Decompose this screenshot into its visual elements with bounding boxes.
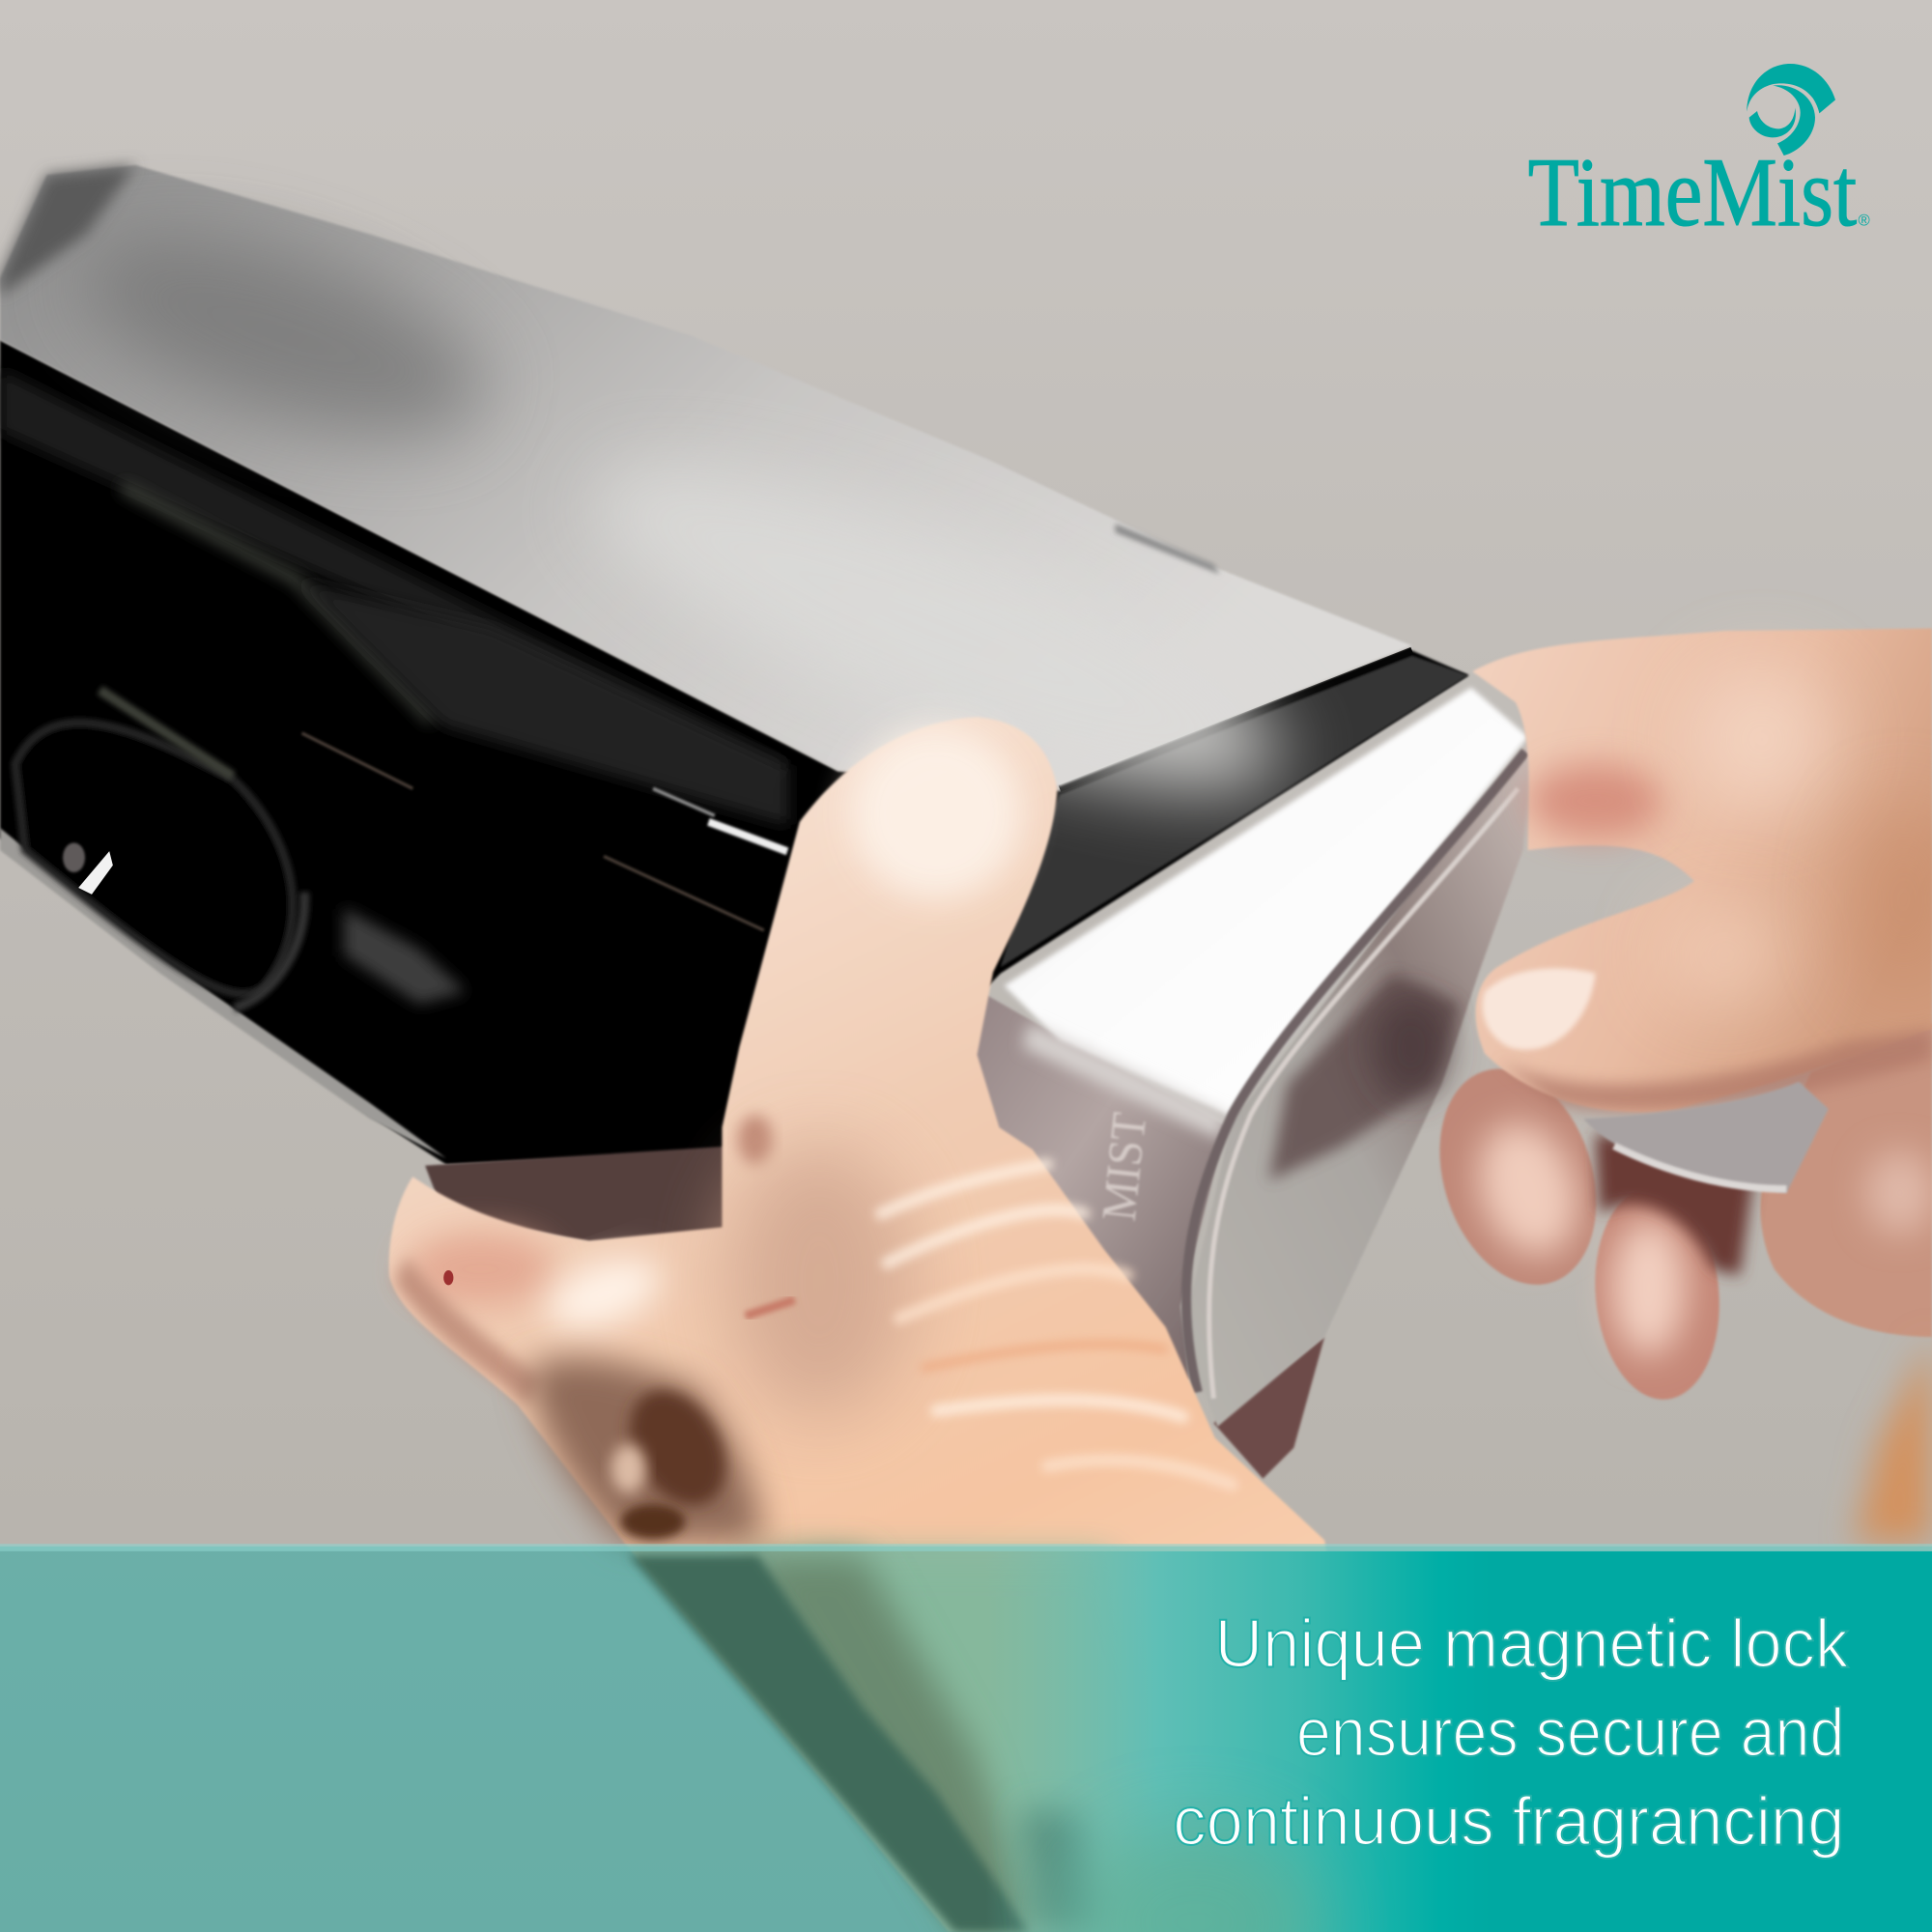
olive reflection line [122,487,433,721]
casing dark top strip [1001,656,1468,967]
hand shadow hair patch [527,1357,761,1543]
dark gap in fingers [1596,1133,1756,1275]
light spot in hair [611,1444,645,1493]
casing speckle highlight [653,788,715,815]
thumb highlight [850,727,1023,899]
middle finger [1413,1048,1623,1305]
cap bright top face [1005,688,1528,1115]
pink thumb pad [407,1233,554,1306]
cap lower face [949,974,1226,1380]
darker hair patch [611,1374,745,1522]
panel dark tip [1115,524,1220,574]
cap darkest reflection [1372,996,1450,1099]
cap side face [1182,739,1530,1427]
logo wordmark: TimeMist [1528,138,1857,247]
logo swirl icon [1747,64,1835,156]
orange wrist blur [1855,1337,1932,1543]
bright web of thumb [538,1246,669,1342]
right hand [1413,629,1932,1543]
knuckle under shadow [1528,764,1663,838]
knuckle light creases [1688,666,1836,813]
red scratch on wrist [746,1300,795,1316]
shaded lower thumb edge [394,1257,542,1405]
lighter patch on panel [559,404,1314,853]
device: silver end cap [949,688,1530,1479]
casing thin brown lines [301,733,764,930]
ring finger highlight [1611,1220,1686,1355]
red scratch [443,1270,453,1285]
casing black seam [1060,650,1412,788]
dark patch bottom [621,1504,685,1539]
casing white glint [707,818,788,855]
banner light top line [0,1544,1932,1551]
lower green glow [1072,1824,1319,1932]
finger shadow [1497,1029,1932,1112]
cap dark reflection [1269,974,1460,1180]
casing grey reflection patch [299,582,788,826]
forearm lower shadow [1023,1811,1109,1932]
device: frosted top panel [0,165,1412,853]
key tab light edge [1614,1146,1786,1189]
cap rim lines [1186,752,1525,1392]
smudge on panel [60,194,507,476]
fingernail [1483,968,1596,1050]
caption line 3: continuous fragrancing [1173,1782,1844,1859]
device: dispenser body [0,340,1468,1242]
caption text [1173,1605,1849,1859]
fingertip nail lower right [1865,1151,1932,1235]
metal key tab [1583,1082,1829,1193]
casing upper sheen [0,370,788,788]
forearm light area [788,1555,1244,1932]
registered mark: ® [1858,211,1870,229]
caption line 1: Unique magnetic lock [1215,1605,1849,1682]
forearm dark edge [629,1555,1029,1932]
cap top face soft edge [1023,1023,1227,1140]
tan base of thumb [727,1146,912,1417]
casing silver lower edge [0,828,446,1158]
left hand [389,717,1392,1932]
middle finger highlight [1463,1110,1593,1268]
index knuckle creases [1663,906,1786,1005]
knuckle shadow [738,1115,773,1164]
TimeMist logo [1528,64,1870,247]
vent slot ring [14,690,466,1008]
bright palm creases [881,1164,1233,1485]
underside shadow [425,1146,733,1242]
embossed cap lettering: MIST [1093,1110,1157,1224]
orange tone on index [1848,801,1932,998]
caption line 2: ensures secure and [1296,1694,1844,1771]
cap rim highlight [1209,788,1518,1399]
upper hand and index finger [1472,629,1932,1112]
cap bottom shadow [1213,1337,1324,1479]
forearm brown mid tone [739,1555,1035,1932]
ring finger [1586,1182,1728,1405]
banner opaque teal right [985,1551,1932,1932]
back fingers: lower right [1760,1023,1932,1337]
panel top left corner [0,165,135,296]
device black casing [0,340,1468,1164]
teal text banner [0,1544,1932,1932]
